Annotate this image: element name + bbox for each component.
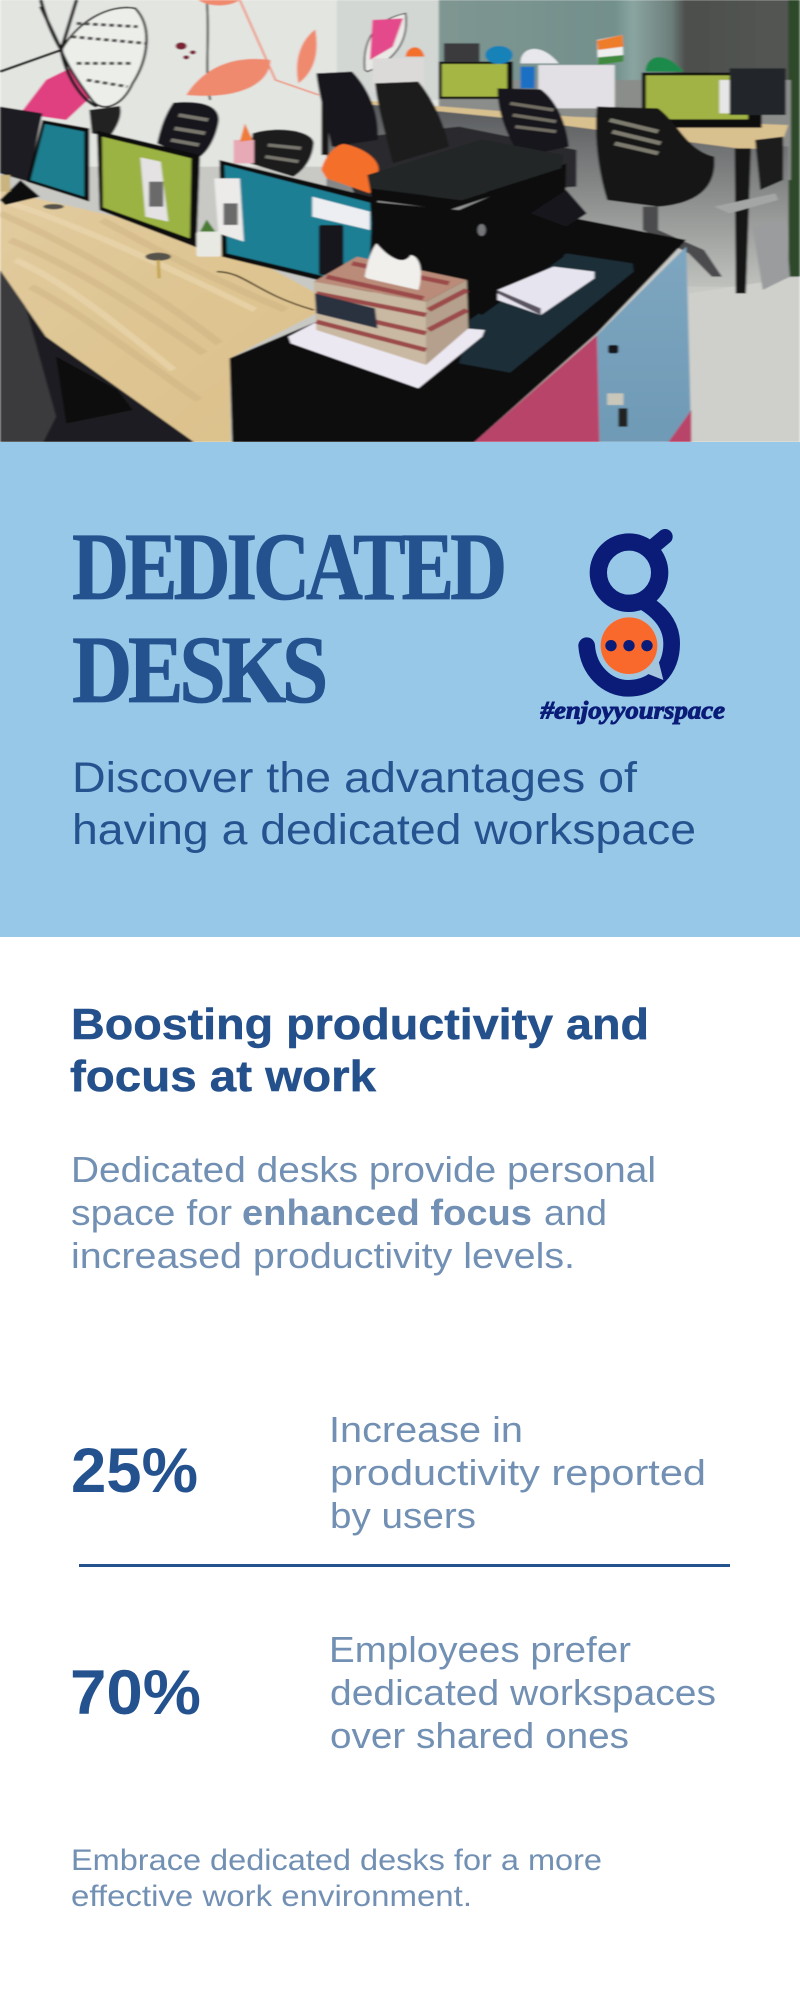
stat: 70 percent: Employees prefer [329, 1629, 631, 1670]
far chairs [730, 68, 786, 115]
stat: 25 percent: Increase in [329, 1409, 523, 1450]
stat: 25 percent: 25% [71, 1436, 198, 1506]
heading: title: DESKS [72, 616, 325, 723]
text block: description: space for [71, 1192, 232, 1233]
subtitle [72, 754, 696, 854]
text block: closing line: effective work environment. [71, 1880, 472, 1913]
subtitle: Discover the advantages of [72, 754, 638, 802]
heading: title [72, 513, 504, 723]
text block: description: Dedicated desks provide personal [71, 1149, 656, 1190]
wall art [22, 68, 91, 120]
heading: boosting productivity: Boosting productivity and [71, 1000, 649, 1049]
text block: description [71, 1149, 656, 1276]
panel: blue header [0, 442, 800, 937]
tissue box [288, 317, 485, 388]
cabinet [230, 217, 686, 442]
text block: description: increased productivity levels. [71, 1235, 575, 1276]
subtitle: having a dedicated workspace [72, 806, 696, 854]
text block: closing line: Embrace dedicated desks for a more [71, 1844, 602, 1877]
stat: 25 percent: productivity reported [330, 1452, 706, 1493]
stat: 70 percent [70, 1629, 716, 1756]
icon: logo [540, 537, 725, 724]
stat: 70 percent: 70% [70, 1658, 201, 1728]
partitions [27, 120, 89, 202]
heading: boosting productivity: focus at work [70, 1052, 377, 1101]
photo: office with dedicated desks [0, 0, 800, 442]
heading: boosting productivity [70, 1000, 649, 1101]
monitor [0, 107, 42, 182]
stat: 25 percent: by users [330, 1495, 476, 1536]
stat: 70 percent: dedicated workspaces [330, 1672, 716, 1713]
near desk [0, 190, 316, 442]
far desks [370, 100, 790, 150]
near chairs behind partition [89, 106, 121, 137]
text block: closing line [71, 1844, 602, 1913]
text block: description: enhanced focus [242, 1192, 532, 1233]
stat: 25 percent [71, 1409, 706, 1536]
icon: logo: #enjoyyourspace [540, 696, 725, 724]
heading: title: DEDICATED [72, 513, 504, 620]
printer [370, 163, 566, 315]
stat: 70 percent: over shared ones [330, 1715, 629, 1756]
floor [327, 100, 788, 287]
text block: description: and [544, 1192, 607, 1233]
